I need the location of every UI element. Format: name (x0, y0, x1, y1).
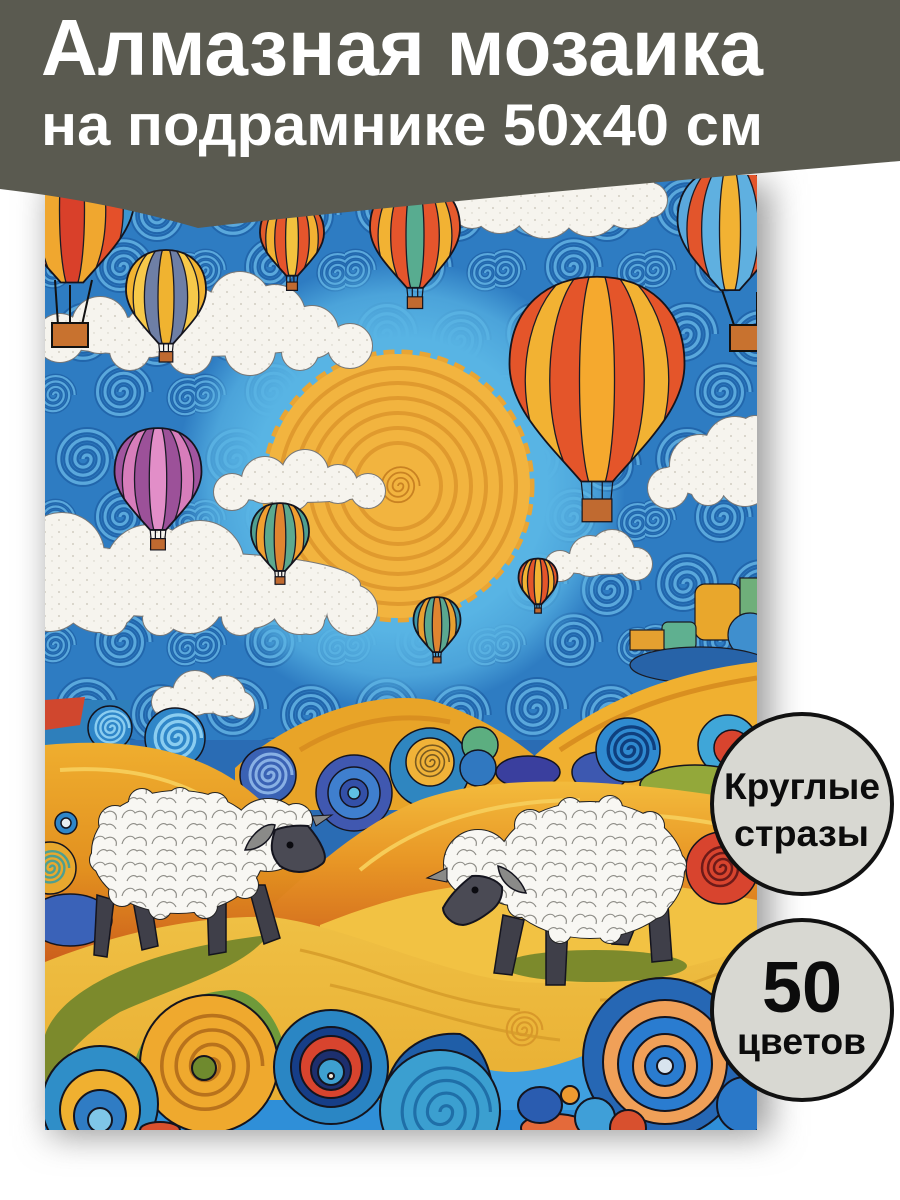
balloon: green and orange (251, 499, 309, 584)
hill light behind sheep (320, 887, 757, 983)
target ball (274, 1010, 388, 1124)
small orange and blue shapes (140, 1077, 773, 1146)
bottom swirl balls (45, 977, 757, 1130)
hay swirl on hill (507, 1012, 542, 1045)
hill streaks (60, 769, 750, 870)
sky (45, 175, 757, 775)
balloon: purple (114, 422, 202, 550)
swirl ball: red (686, 832, 758, 904)
grass shadows (45, 935, 687, 1095)
badge text: Круглые (724, 766, 880, 807)
cloud: small right (545, 530, 652, 581)
cloud: small low (152, 671, 254, 718)
big right ball (583, 978, 743, 1138)
dark ball behind teal (385, 1034, 497, 1130)
cloud: big left (14, 513, 377, 635)
balloon: small red (518, 556, 558, 613)
village decor (629, 577, 757, 682)
balloon: top left (45, 195, 134, 348)
balloon: small teal (414, 594, 460, 663)
balloon: yellow and grey (126, 244, 206, 362)
title line 1: Алмазная мозаика (41, 3, 763, 92)
yellow spiral ball (135, 990, 285, 1133)
land base (130, 740, 553, 858)
painting canvas (45, 175, 757, 1130)
cloud: right (648, 416, 771, 508)
badge: round rhinestones (712, 714, 892, 894)
badge number and text: 50 (762, 948, 842, 1028)
cloud: top right (454, 182, 668, 239)
left decor (45, 811, 113, 947)
painting shadow (50, 184, 770, 1136)
badge number and text: цветов (737, 1021, 866, 1062)
sheep: left (90, 788, 332, 957)
badge number and text (737, 948, 866, 1062)
balloon: small top (259, 214, 325, 291)
balloon: top right (676, 175, 757, 352)
hill middle band (314, 782, 757, 920)
balloon: large striped (510, 264, 684, 522)
badge text (724, 766, 880, 854)
title (41, 3, 763, 158)
teal ball (380, 1050, 500, 1170)
sheep: right (427, 796, 686, 985)
balloon: top centre (369, 201, 461, 310)
cloud: upper left (36, 272, 372, 375)
hill front (45, 916, 714, 1100)
cloud: centre (214, 450, 385, 511)
blue and yellow ball (42, 1046, 158, 1162)
sun (265, 353, 531, 619)
badge text: стразы (734, 813, 869, 854)
hill left (45, 742, 311, 962)
badge: 50 colours (712, 920, 892, 1100)
bottom band (45, 1100, 760, 1130)
hill front streaks (300, 950, 740, 1040)
swirl balls row (88, 706, 758, 831)
title line 2: на подрамнике 50х40 см (41, 93, 763, 158)
water strip (490, 1056, 592, 1110)
hills back (45, 662, 757, 810)
header banner (0, 0, 900, 228)
